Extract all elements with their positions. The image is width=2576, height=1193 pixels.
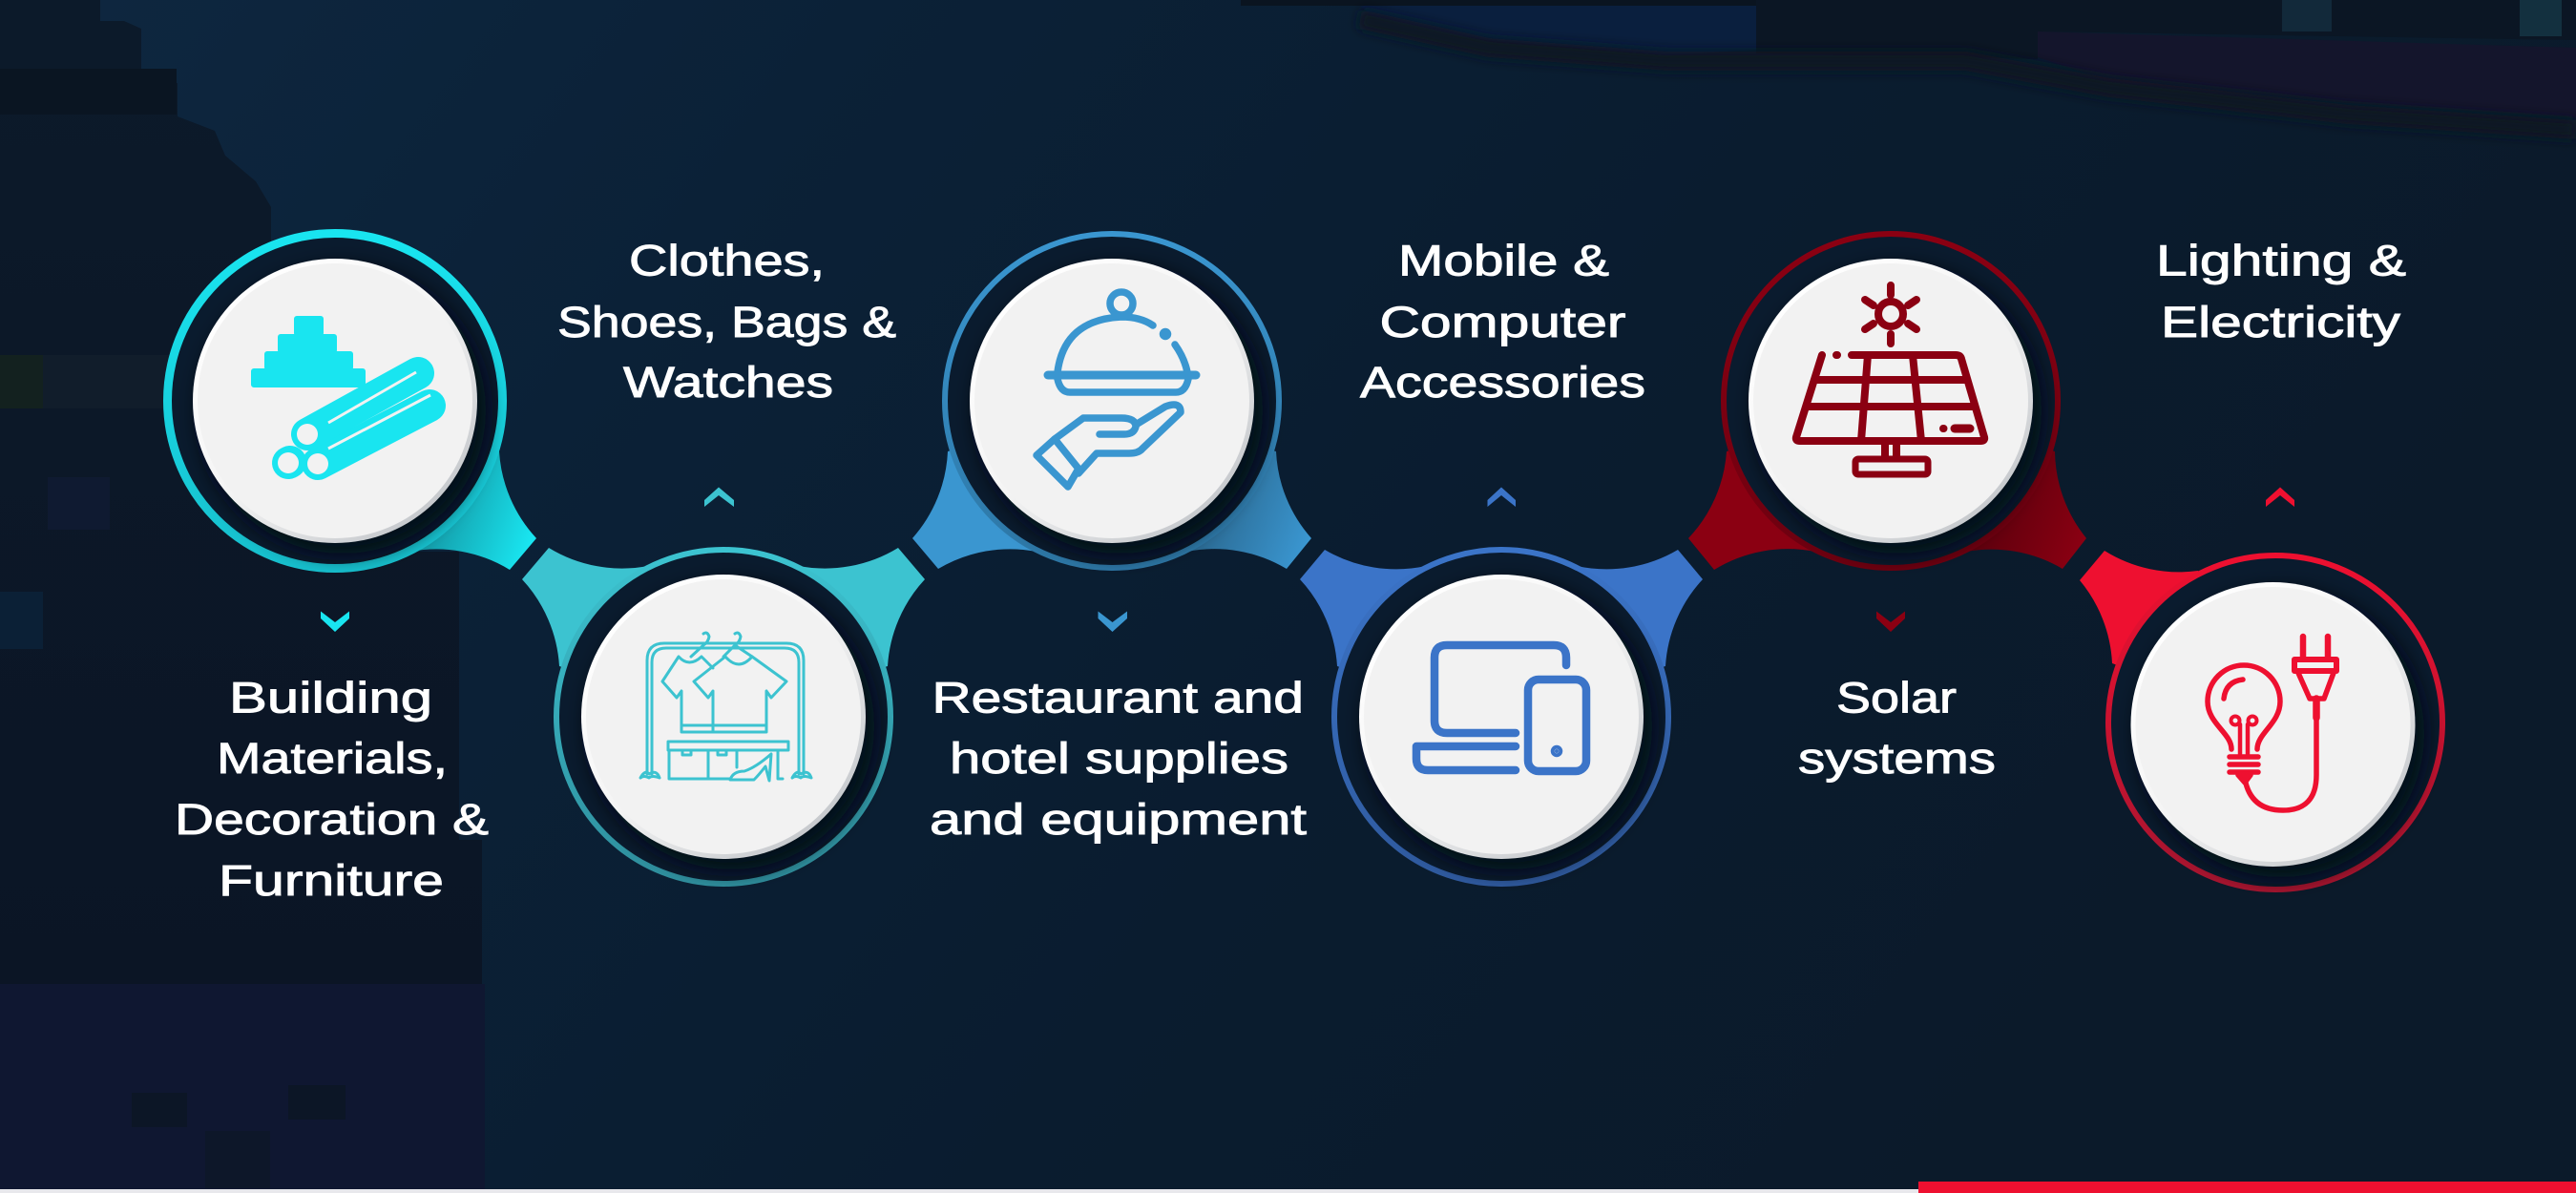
ring	[168, 233, 502, 569]
label: Building Materials: Decoration &	[175, 795, 489, 844]
icon: bulb and plug	[2208, 637, 2336, 810]
step 4: computer circle	[1300, 550, 1703, 884]
shadow	[976, 267, 1263, 554]
label: Lighting	[2156, 237, 2406, 346]
connector wing	[2080, 551, 2275, 722]
label: Building Materials: Furniture	[219, 856, 444, 905]
label: Clothes: Shoes, Bags &	[557, 298, 896, 346]
disc face	[1364, 579, 1639, 854]
connector wings	[1300, 550, 1703, 717]
shadow	[199, 267, 486, 554]
shadow	[2138, 591, 2424, 877]
white disc	[1749, 259, 2033, 543]
disc face	[2136, 587, 2411, 862]
label: Restaurant: hotel supplies	[950, 734, 1288, 783]
white disc	[1359, 575, 1644, 859]
ring	[945, 234, 1279, 568]
white disc	[2130, 582, 2415, 867]
chevron: step 1 down	[321, 611, 349, 632]
label: Mobile	[1360, 237, 1645, 407]
disc face	[974, 263, 1249, 538]
ring	[1724, 234, 2058, 568]
step 1: building materials circle	[168, 233, 536, 570]
label: Building Materials: Building	[229, 674, 432, 722]
label: Lighting: Lighting &	[2156, 237, 2406, 284]
background: distant ship at the top right	[1241, 0, 2576, 130]
ring	[1334, 550, 1668, 884]
label: Mobile: Computer	[1380, 298, 1626, 346]
shadow	[1755, 267, 2042, 554]
disc face	[1753, 263, 2028, 538]
label: Lighting: Electricity	[2161, 298, 2401, 346]
connector wings	[522, 548, 925, 717]
white disc	[193, 259, 477, 543]
label: Clothes: Watches	[623, 358, 833, 407]
label: Solar: Solar	[1836, 674, 1957, 722]
label: Building Materials: Materials,	[217, 734, 448, 783]
chevron: step 4 up	[1487, 487, 1516, 507]
ring	[2108, 555, 2442, 890]
connector wing	[335, 401, 536, 570]
chevron: step 3 down	[1098, 611, 1127, 632]
bottom white line	[0, 1189, 1918, 1193]
icon: cloche and hand	[1037, 292, 1196, 487]
label: Mobile: Mobile &	[1398, 237, 1609, 284]
shadow	[588, 583, 874, 869]
label: Mobile: Accessories	[1360, 358, 1645, 407]
connector wing left	[912, 401, 1112, 569]
label: Restaurant: Restaurant and	[932, 674, 1304, 722]
icon: solar panel	[1796, 285, 1984, 474]
step 2: clothes circle	[522, 548, 925, 884]
bottom red bar	[1918, 1182, 2576, 1193]
connector wing right	[1112, 401, 1311, 569]
connector wing left	[1688, 401, 1891, 570]
label: Building Materials	[175, 674, 489, 905]
chevron: step 5 down	[1876, 611, 1905, 632]
white disc	[970, 259, 1254, 543]
white disc	[581, 575, 866, 859]
step 5: solar circle	[1688, 234, 2086, 570]
label: Restaurant: and equipment	[930, 795, 1308, 844]
ring	[556, 550, 890, 884]
disc face	[586, 579, 861, 854]
label: Restaurant	[930, 674, 1308, 844]
chevron: step 2 up	[704, 487, 734, 507]
icon: clothes rack	[640, 633, 811, 781]
disc face	[198, 263, 472, 538]
label: Solar: systems	[1798, 734, 1996, 783]
connector wing right	[1891, 401, 2086, 569]
label: Clothes: Clothes,	[629, 237, 825, 284]
step 3: restaurant circle	[912, 234, 1311, 569]
step 6: lighting circle	[2080, 551, 2442, 890]
label: Clothes	[557, 237, 896, 407]
icon: bars and pipes	[251, 316, 430, 474]
background: container ship on the left	[0, 0, 485, 1189]
label: Solar	[1798, 674, 1996, 783]
shadow	[1366, 583, 1652, 869]
icon: laptop and phone	[1416, 645, 1586, 771]
chevron: step 6 up	[2266, 487, 2294, 507]
